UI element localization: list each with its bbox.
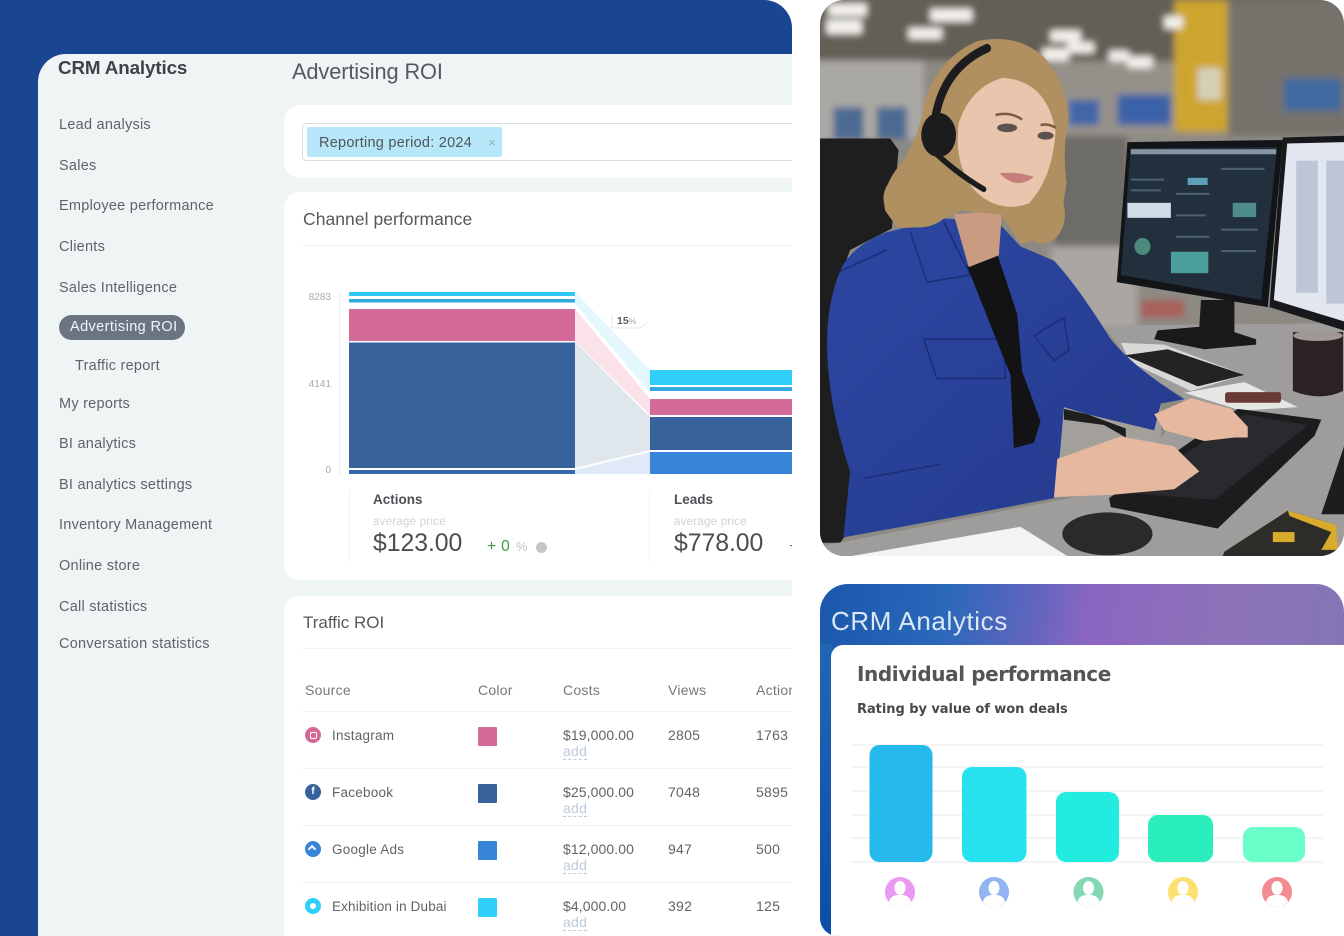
white content card	[831, 645, 1344, 936]
sidebar navigation: BI analytics settings	[59, 477, 192, 493]
avatars	[885, 877, 1292, 907]
active item: Advertising ROI	[59, 315, 185, 340]
stat: Leads: Leads	[674, 492, 713, 507]
panel: channel performance	[284, 192, 824, 580]
flows between stages	[575, 292, 650, 474]
sidebar navigation	[59, 117, 214, 652]
left edge gradient	[820, 644, 832, 936]
chair	[820, 139, 899, 543]
sidebar navigation: Inventory Management	[59, 517, 212, 533]
mug	[1293, 330, 1343, 396]
table: traffic sources: Costs	[563, 682, 600, 698]
sidebar navigation: BI analytics	[59, 436, 136, 452]
filter tag	[307, 127, 502, 157]
bars	[870, 745, 1305, 862]
panel: CRM analytics dashboard	[0, 0, 792, 936]
sidebar navigation: Traffic report	[75, 358, 160, 374]
row: Google Ads	[305, 841, 780, 874]
monitor left	[1117, 140, 1283, 349]
heading: Traffic ROI: Traffic ROI	[303, 613, 384, 632]
black top	[967, 254, 1041, 448]
sidebar navigation: My reports	[59, 396, 130, 412]
callout: 15%: 15%	[617, 315, 637, 327]
stat: Actions	[349, 490, 640, 562]
sidebar navigation: Call statistics	[59, 599, 147, 615]
axis: 8283	[309, 292, 331, 303]
face	[958, 78, 1056, 207]
row: Facebook: f	[311, 786, 315, 797]
table: traffic sources: Views	[668, 682, 706, 698]
facial features	[995, 114, 1056, 183]
bar: Actions	[349, 292, 575, 474]
funnel chart	[309, 292, 792, 476]
front keyboard	[1109, 409, 1321, 529]
chair arm	[1064, 409, 1126, 437]
filter tag: ×	[488, 135, 496, 150]
callout: 15%	[612, 314, 648, 328]
hair	[883, 39, 1068, 244]
row: Exhibition in Dubai	[305, 898, 780, 931]
subheading: Rating by value of won deals	[857, 702, 1068, 717]
bar: Leads	[650, 370, 792, 474]
sidebar navigation: Online store	[59, 558, 140, 574]
stat: Actions: average price	[373, 516, 446, 528]
sidebar navigation: Sales Intelligence	[59, 280, 177, 296]
headset	[921, 48, 987, 189]
floor under arm	[1054, 404, 1161, 468]
row: Google Ads: 947	[668, 841, 692, 857]
row: Facebook: 7048	[668, 784, 700, 800]
photo: operator with headset at a CRM workstation	[820, 0, 1344, 556]
row: Exhibition in Dubai: add	[563, 914, 587, 930]
panel: Traffic ROI	[284, 596, 824, 936]
neck	[954, 211, 1002, 267]
stat: Leads	[649, 490, 793, 562]
row: Exhibition in Dubai: $4,000.00	[563, 898, 626, 914]
axis: 0	[325, 465, 331, 476]
active item: Advertising ROI: Advertising ROI	[70, 319, 178, 335]
sidebar navigation: Lead analysis	[59, 117, 151, 133]
row: Instagram: Instagram	[332, 728, 394, 743]
row: Instagram: add	[563, 743, 587, 759]
stat: Actions: $123.00	[373, 530, 462, 557]
axis: 4141	[309, 379, 331, 390]
axis	[309, 292, 347, 476]
cables and PC	[1321, 446, 1344, 514]
row: Instagram	[305, 727, 788, 760]
sidebar navigation: Employee performance	[59, 198, 214, 214]
sidebar navigation: Sales	[59, 158, 97, 174]
table: traffic sources: Source	[305, 682, 351, 698]
row: Facebook: Facebook	[332, 785, 393, 800]
heading: Individual performance	[857, 662, 1111, 686]
row: Facebook: 5895	[756, 784, 788, 800]
desk	[820, 323, 1344, 556]
page heading: Advertising ROI	[292, 59, 443, 84]
notebook	[852, 527, 1067, 556]
row: Instagram: 2805	[668, 727, 700, 743]
stat: Actions: Actions	[373, 492, 423, 507]
jacket	[827, 219, 1184, 537]
sidebar navigation: Conversation statistics	[59, 636, 210, 652]
stat: Leads: $778.00	[674, 530, 763, 557]
row: Google Ads: add	[563, 857, 587, 873]
row: Exhibition in Dubai: 125	[756, 898, 780, 914]
panel: individual performance card	[820, 584, 1344, 936]
yellow meter	[1223, 511, 1338, 556]
desk keyboard rear	[1125, 349, 1244, 386]
stat: Actions: %	[516, 539, 528, 554]
blurred warehouse background	[813, 0, 1344, 564]
row: Facebook: add	[563, 800, 587, 816]
row: Facebook: $25,000.00	[563, 784, 634, 800]
table: traffic sources	[302, 682, 792, 931]
monitor right	[1269, 136, 1344, 330]
app window	[38, 54, 818, 936]
card title: CRM Analytics	[831, 606, 1008, 636]
row: Google Ads: Google Ads	[332, 842, 404, 857]
row: Instagram: 1763	[756, 727, 788, 743]
heading: channel performance: Channel performance	[303, 209, 472, 229]
row: Instagram: $19,000.00	[563, 727, 634, 743]
row: Exhibition in Dubai: 392	[668, 898, 692, 914]
paper under rear keyboard	[1121, 343, 1244, 391]
stat: Actions: + 0	[487, 538, 510, 555]
row: Facebook	[305, 784, 788, 817]
paper and phone	[1184, 382, 1298, 411]
filter tag: Reporting period: 2024	[319, 135, 472, 151]
row: Exhibition in Dubai: Exhibition in Dubai	[332, 899, 447, 914]
table: traffic sources: Color	[478, 682, 513, 698]
stat: Leads: average price	[674, 516, 747, 528]
bar chart: rating	[852, 744, 1323, 907]
mouse	[1062, 512, 1153, 555]
app title: CRM Analytics	[58, 57, 187, 78]
sidebar navigation: Clients	[59, 239, 105, 255]
row: Google Ads: $12,000.00	[563, 841, 634, 857]
panel: reporting period filter	[284, 105, 824, 178]
row: Google Ads: 500	[756, 841, 780, 857]
jacket details	[840, 221, 1069, 479]
hands	[1054, 398, 1248, 497]
